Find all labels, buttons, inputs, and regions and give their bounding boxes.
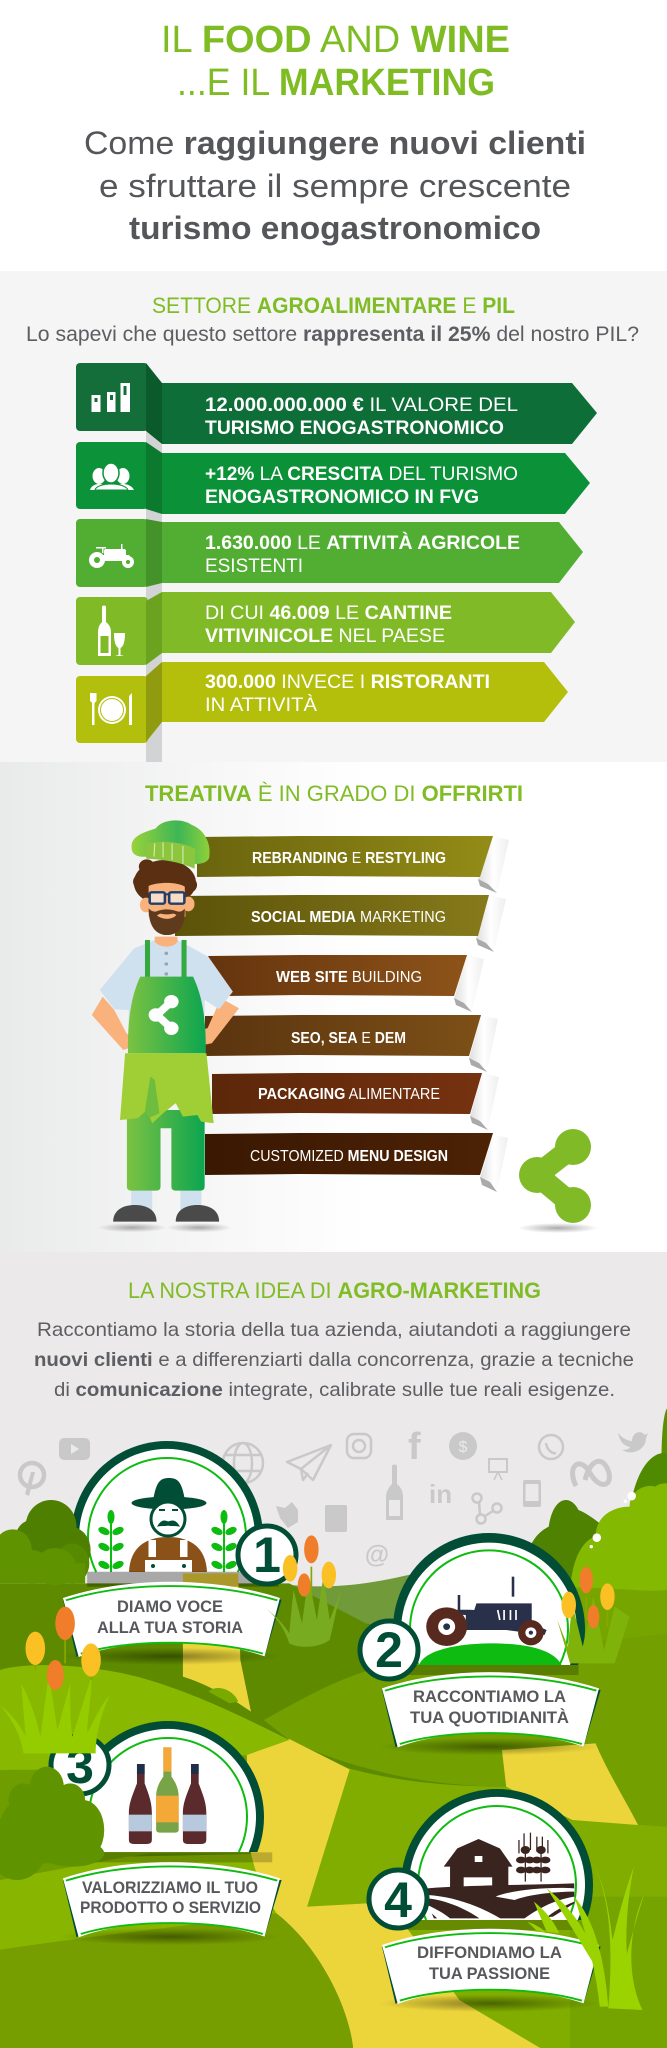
arch 3: [72, 1721, 264, 1852]
illustration: chef: [92, 820, 239, 1232]
text: row 5: [205, 671, 490, 716]
chef hat: [132, 820, 210, 869]
row 1: valore turismo: [76, 363, 597, 444]
number 4: [369, 1870, 427, 1928]
panel: treativa: [0, 762, 667, 1252]
landscape background and far bushes: [0, 1408, 667, 2048]
text: row 1: 12.000.000.000 € IL VALORE DEL: [205, 394, 518, 416]
chef neck: [155, 937, 178, 947]
icon: phone: [523, 1480, 541, 1507]
text: card 2: [410, 1687, 569, 1727]
text: card 1: [97, 1597, 243, 1637]
arch 2: [393, 1533, 585, 1665]
row 4: cantine: [76, 592, 575, 665]
farmer icon: [129, 1478, 207, 1572]
icon: bottle grey: [386, 1464, 403, 1520]
chef legs and shoes: [113, 1110, 219, 1222]
icon: coin: [449, 1432, 477, 1460]
text: row 2: +12% LA CRESCITA DEL TURISMO: [205, 463, 518, 485]
signpost pole: [146, 420, 162, 763]
tulips: [26, 1492, 636, 1690]
bottles icon: [129, 1747, 206, 1844]
text: card 2: TUA QUOTIDIANITÀ: [410, 1708, 569, 1727]
text: card 1: DIAMO VOCE: [117, 1597, 223, 1616]
strip 4: [205, 1015, 498, 1072]
icon: coin: $: [459, 1439, 468, 1456]
grass center: [266, 1577, 342, 1647]
bush covering card 3: [0, 1767, 104, 1880]
chef head: [133, 859, 197, 935]
text: agro-marketing paragraph: [34, 1319, 634, 1401]
text: row 2: [205, 463, 518, 508]
barn icon: [428, 1833, 574, 1919]
icon: tractor white: [89, 544, 134, 568]
icon: book: [325, 1505, 347, 1532]
text: agro-marketing paragraph: nuovi clienti e a differenziarti dalla concorrenza, grazie a tecniche: [34, 1349, 634, 1371]
icon: presentation: [489, 1459, 507, 1480]
text: row 5: IN ATTIVITÀ: [205, 693, 317, 716]
subtitle: e sfruttare il sempre crescente: [99, 168, 571, 204]
text: card 4: [417, 1943, 562, 1983]
banner 4: [379, 1929, 601, 2012]
text: row 4: [205, 602, 452, 647]
text: row 2: ENOGASTRONOMICO IN FVG: [205, 486, 479, 508]
strip 1: REBRANDING E RESTYLING: [252, 850, 446, 867]
icon: network: [472, 1494, 502, 1524]
card 2: quotidianità: [360, 1533, 601, 1755]
text: card 3: PRODOTTO O SERVIZIO: [80, 1898, 261, 1917]
landscape: [0, 1408, 667, 2048]
text: intro settore: Lo sapevi che questo settore rappresenta il 25% del nostro PIL?: [26, 323, 639, 346]
landscape ground: [0, 1573, 667, 2048]
icon: plate and cutlery: [90, 693, 132, 725]
grass over card 4: [527, 1857, 644, 2010]
strip 3: [208, 955, 484, 1012]
chef arms: [92, 997, 239, 1050]
subtitle: Come raggiungere nuovi clienti: [84, 125, 586, 161]
text: row 3: 1.630.000 LE ATTIVITÀ AGRICOLE: [205, 531, 520, 554]
strip 5: PACKAGING ALIMENTARE: [258, 1086, 440, 1103]
tractor icon: [419, 1577, 562, 1665]
banner 1: [60, 1582, 282, 1665]
icon: instagram: [347, 1434, 371, 1458]
arch 1: [71, 1441, 263, 1572]
icon: at: @: [365, 1541, 389, 1569]
title: [161, 19, 510, 104]
bushes right: [521, 1408, 667, 1607]
icon: bottle and glass: [98, 606, 125, 656]
number 2: 2: [375, 1622, 403, 1678]
icon: globe: [223, 1443, 263, 1483]
text: card 1: ALLA TUA STORIA: [97, 1618, 243, 1637]
chef shirt: [100, 940, 233, 1053]
strip 3: WEB SITE BUILDING: [276, 969, 422, 986]
icon: whatsapp: [539, 1435, 563, 1459]
heading: settore: SETTORE AGROALIMENTARE E PIL: [152, 293, 515, 318]
social icons: [20, 1426, 648, 1569]
plants: [97, 1510, 238, 1572]
text: row 5: 300.000 INVECE I RISTORANTI: [205, 671, 490, 693]
number 3: [51, 1736, 109, 1794]
row 2: crescita: [76, 442, 590, 514]
background: header: [0, 0, 667, 271]
heading: treativa: TREATIVA È IN GRADO DI OFFRIRTI: [145, 781, 523, 806]
icon: meta: [573, 1461, 609, 1486]
icon: linkedin: in: [429, 1479, 452, 1509]
row 3: attività agricole: [76, 519, 583, 587]
text: row 1: [205, 394, 518, 439]
icon: share big: [518, 1129, 598, 1233]
number 4: 4: [384, 1872, 412, 1928]
text: card 2: RACCONTIAMO LA: [413, 1687, 566, 1706]
text: agro-marketing paragraph: Raccontiamo la storia della tua azienda, aiutandoti a raggiungere: [37, 1319, 631, 1341]
text: agro-marketing paragraph: di comunicazione integrate, calibrate sulle tue reali esigenze.: [54, 1379, 615, 1401]
strip 2: SOCIAL MEDIA MARKETING: [251, 909, 446, 926]
subtitle: [84, 125, 586, 246]
arch 4: [401, 1789, 593, 1920]
text: card 3: [80, 1878, 261, 1917]
text: row 3: ESISTENTI: [205, 555, 303, 577]
strip 1: [197, 836, 509, 893]
icon: youtube: [59, 1438, 90, 1460]
text: row 3: [205, 531, 520, 577]
number 1: [238, 1526, 296, 1584]
icon: bars: [92, 383, 130, 412]
bushes and flowers: [0, 1492, 636, 1880]
strip 6: [205, 1133, 508, 1192]
strip 2: [175, 895, 506, 952]
text: card 4: TUA PASSIONE: [429, 1964, 550, 1983]
number 2: [360, 1621, 418, 1679]
text: row 4: VITIVINICOLE NEL PAESE: [205, 625, 445, 647]
icon: pinterest: [20, 1463, 44, 1496]
chef apron: [120, 940, 214, 1123]
card 1: diamo voce: [60, 1441, 296, 1665]
grass left: [0, 1673, 110, 1753]
text: card 4: DIFFONDIAMO LA: [417, 1943, 562, 1962]
text: row 4: DI CUI 46.009 LE CANTINE: [205, 602, 452, 624]
chef apron share icon: [152, 998, 175, 1032]
banner 3: [60, 1862, 282, 1945]
icon: facebook: f: [408, 1426, 421, 1468]
strip 4: SEO, SEA E DEM: [291, 1030, 406, 1047]
panel: settore agroalimentare: [0, 271, 667, 763]
icon: telegram plane: [287, 1445, 331, 1480]
text: card 3: VALORIZZIAMO IL TUO: [82, 1878, 258, 1897]
text: row 1: TURISMO ENOGASTRONOMICO: [205, 417, 504, 439]
panel: agro-marketing: [0, 1252, 667, 2048]
icon: people: [90, 463, 134, 490]
icon: thumbs: [276, 1502, 298, 1528]
number 1: 1: [253, 1527, 281, 1583]
bush top-left: [0, 1500, 91, 1585]
title: ...E IL MARKETING: [177, 62, 495, 104]
heading: agro-marketing: LA NOSTRA IDEA DI AGRO-MARKETING: [128, 1278, 541, 1303]
strip 6: CUSTOMIZED MENU DESIGN: [250, 1148, 448, 1165]
icon: twitter: [618, 1432, 648, 1452]
banner 2: [379, 1672, 601, 1755]
title: IL FOOD AND WINE: [161, 19, 510, 61]
strip 5: [212, 1073, 499, 1130]
row 5: ristoranti: [76, 662, 568, 743]
card 3: prodotto: [51, 1721, 282, 1945]
number 3: 3: [66, 1738, 94, 1794]
subtitle: turismo enogastronomico: [129, 210, 541, 246]
card 4: passione: [369, 1789, 644, 2012]
grass right: [557, 1597, 630, 1663]
